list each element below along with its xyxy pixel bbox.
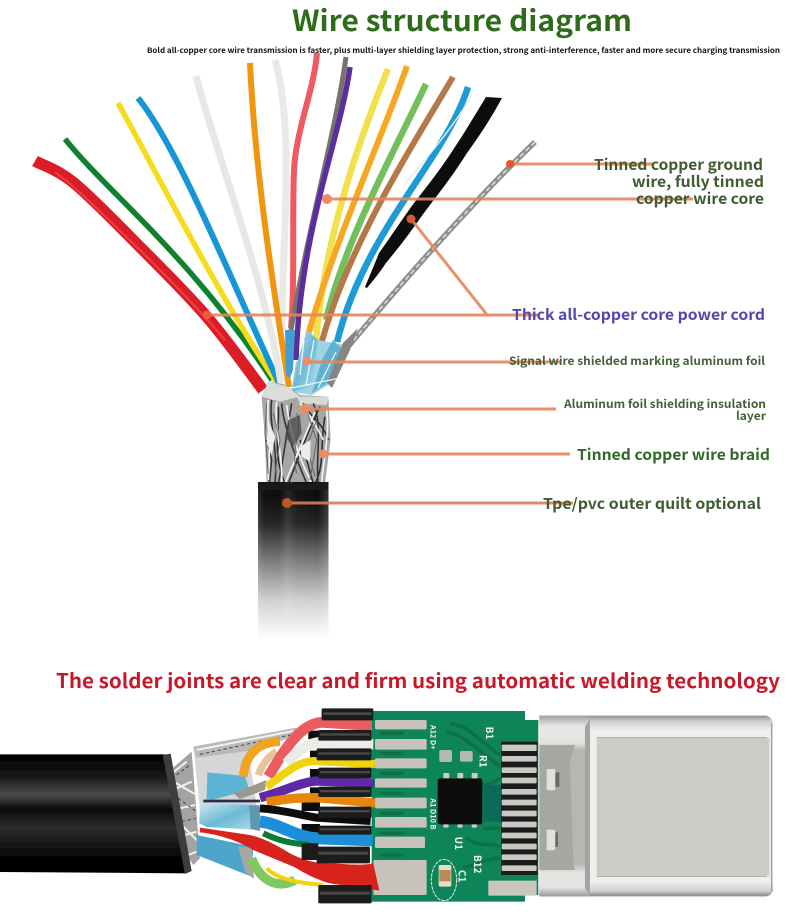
label: aluminum foil shielding: layer — [736, 408, 767, 424]
label: tinned copper ground wire: wire, fully tinned — [632, 171, 764, 192]
silkscreen labels: B12 — [471, 855, 486, 874]
wire: grey strand — [291, 57, 346, 330]
blue foil shields — [197, 772, 267, 879]
silkscreen labels: R1 — [476, 755, 491, 768]
USB-C circuit board — [372, 711, 773, 902]
wire: blue 2 — [337, 87, 468, 342]
black jacket — [0, 754, 185, 873]
label: tinned copper ground wire — [594, 154, 764, 209]
heading: soldering: The solder joints are clear and firm using automatic welding technology — [56, 665, 781, 694]
label: aluminum foil shielding — [563, 396, 767, 424]
tinned copper braid and foil — [262, 382, 331, 483]
wire: yellow 2 — [316, 69, 388, 340]
wire: orange 2 — [308, 66, 407, 335]
leader anchor dots — [202, 160, 514, 508]
soldered wires — [243, 722, 375, 885]
wire: purple — [296, 67, 350, 360]
silkscreen labels: U1 — [452, 837, 467, 850]
horizontal cable with soldered wires — [0, 708, 379, 903]
wire: black — [365, 97, 502, 288]
silkscreen labels: A12 D+ — [428, 724, 439, 750]
solder pads — [373, 720, 427, 895]
label: thick power cord: Thick all-copper core power cord — [512, 304, 765, 325]
label: tinned copper ground wire: Tinned copper ground — [594, 154, 763, 175]
wire: yellow — [118, 103, 277, 383]
aluminium foil shields on the signal pairs — [285, 328, 358, 395]
gold finger contacts — [501, 742, 538, 875]
wire: foil strand — [404, 95, 472, 185]
wire: white 1 — [196, 76, 281, 383]
label: aluminum foil shielding: Aluminum foil shielding insulation — [563, 396, 766, 412]
wire: brown — [319, 77, 453, 352]
black heat-shrink sleeves — [302, 708, 373, 903]
outer TPE/PVC cable jacket fading to white — [256, 482, 331, 640]
silkscreen labels: A1 D10 B — [428, 797, 439, 830]
wire: orange — [250, 63, 289, 387]
silkscreen labels — [428, 724, 498, 883]
wire: tinned ground — [337, 142, 535, 360]
small components — [431, 750, 537, 901]
leader lines — [205, 164, 693, 503]
label: tinned copper wire braid: Tinned copper wire braid — [577, 444, 770, 465]
board traces — [380, 723, 500, 868]
label: outer quilt: Tpe/pvc outer quilt optional — [543, 493, 761, 514]
IC chip — [438, 773, 482, 828]
braid and foil sleeve — [167, 728, 297, 865]
silkscreen labels: B1 — [483, 727, 498, 739]
wire: pink — [291, 53, 317, 328]
subtitle: Bold all-copper core wire transmission is faster, plus multi-layer shielding layer protection, strong anti-interference, faster and more secure charging transmission — [147, 45, 780, 56]
fanned-out coloured wires — [35, 53, 535, 390]
wire: white 2 — [275, 60, 286, 330]
label: signal wire foil: Signal wire shielded marking aluminum foil — [509, 353, 765, 369]
wire: green — [65, 139, 272, 380]
wire: red thick — [35, 161, 263, 390]
USB-C connector shell — [539, 716, 773, 896]
wire: blue — [138, 98, 279, 383]
silkscreen labels: C1 — [455, 870, 470, 883]
wire: green 2 — [326, 84, 426, 320]
label: tinned copper ground wire: copper wire core — [636, 188, 764, 209]
